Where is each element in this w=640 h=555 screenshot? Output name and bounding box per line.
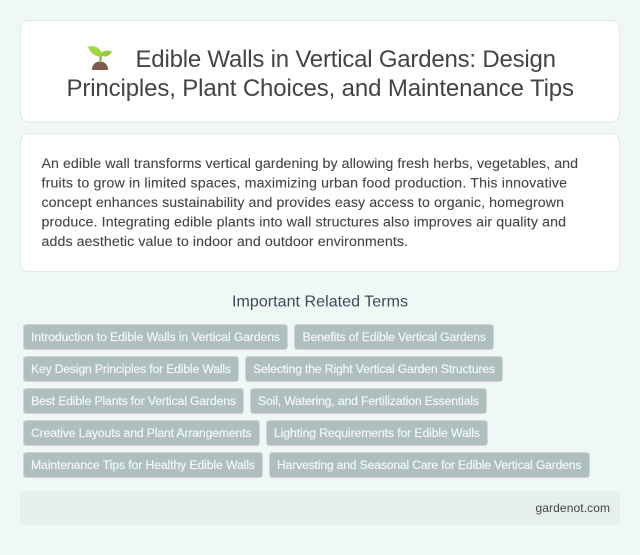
footer site name: gardenot.com <box>536 501 610 515</box>
intro paragraph: fruits to grow in limited spaces, maximizing urban food production. This innovative <box>42 176 567 192</box>
tag: benefits: Benefits of Edible Vertical Gardens <box>302 330 486 344</box>
tag: introduction <box>24 324 288 350</box>
tag: best plants <box>24 388 244 414</box>
tag: maintenance <box>24 452 262 478</box>
tag: soil and watering <box>250 388 486 414</box>
title: Edible Walls in Vertical Gardens: Design <box>136 46 556 73</box>
tag: structures <box>246 356 502 382</box>
tag: benefits <box>294 324 494 350</box>
tag: introduction: Introduction to Edible Walls in Vertical Gardens <box>31 330 280 344</box>
intro paragraph: adds aesthetic value to indoor and outdoor environments. <box>42 234 408 250</box>
tag: best plants: Best Edible Plants for Vertical Gardens <box>31 394 236 408</box>
tag: layouts: Creative Layouts and Plant Arrangements <box>31 426 252 440</box>
heading: related terms: Important Related Terms <box>232 294 408 310</box>
tag: harvesting <box>270 452 590 478</box>
footer <box>20 491 620 525</box>
icon: sprout <box>88 46 112 70</box>
title <box>66 46 574 102</box>
intro paragraph: produce. Integrating edible plants into wall structures also improves air quality and <box>42 214 566 230</box>
tag: layouts <box>24 420 260 446</box>
tag: lighting: Lighting Requirements for Edible Walls <box>274 426 480 440</box>
tag: design principles <box>24 356 238 382</box>
tag: maintenance: Maintenance Tips for Healthy Edible Walls <box>31 458 255 472</box>
tag list <box>24 324 590 478</box>
tag: structures: Selecting the Right Vertical Garden Structures <box>253 362 495 376</box>
tag: harvesting: Harvesting and Seasonal Care for Edible Vertical Gardens <box>277 458 582 472</box>
tag: lighting <box>266 420 488 446</box>
panel: intro text card <box>20 134 620 272</box>
title: Principles, Plant Choices, and Maintenance Tips <box>66 75 574 102</box>
tag: soil and watering: Soil, Watering, and Fertilization Essentials <box>258 394 479 408</box>
intro paragraph: An edible wall transforms vertical gardening by allowing fresh herbs, vegetables, and <box>42 156 578 172</box>
intro paragraph <box>42 156 578 250</box>
intro paragraph: concept enhances sustainability and provides easy access to organic, homegrown <box>42 195 564 211</box>
tag: design principles: Key Design Principles for Edible Walls <box>31 362 231 376</box>
panel: title card <box>20 20 620 122</box>
